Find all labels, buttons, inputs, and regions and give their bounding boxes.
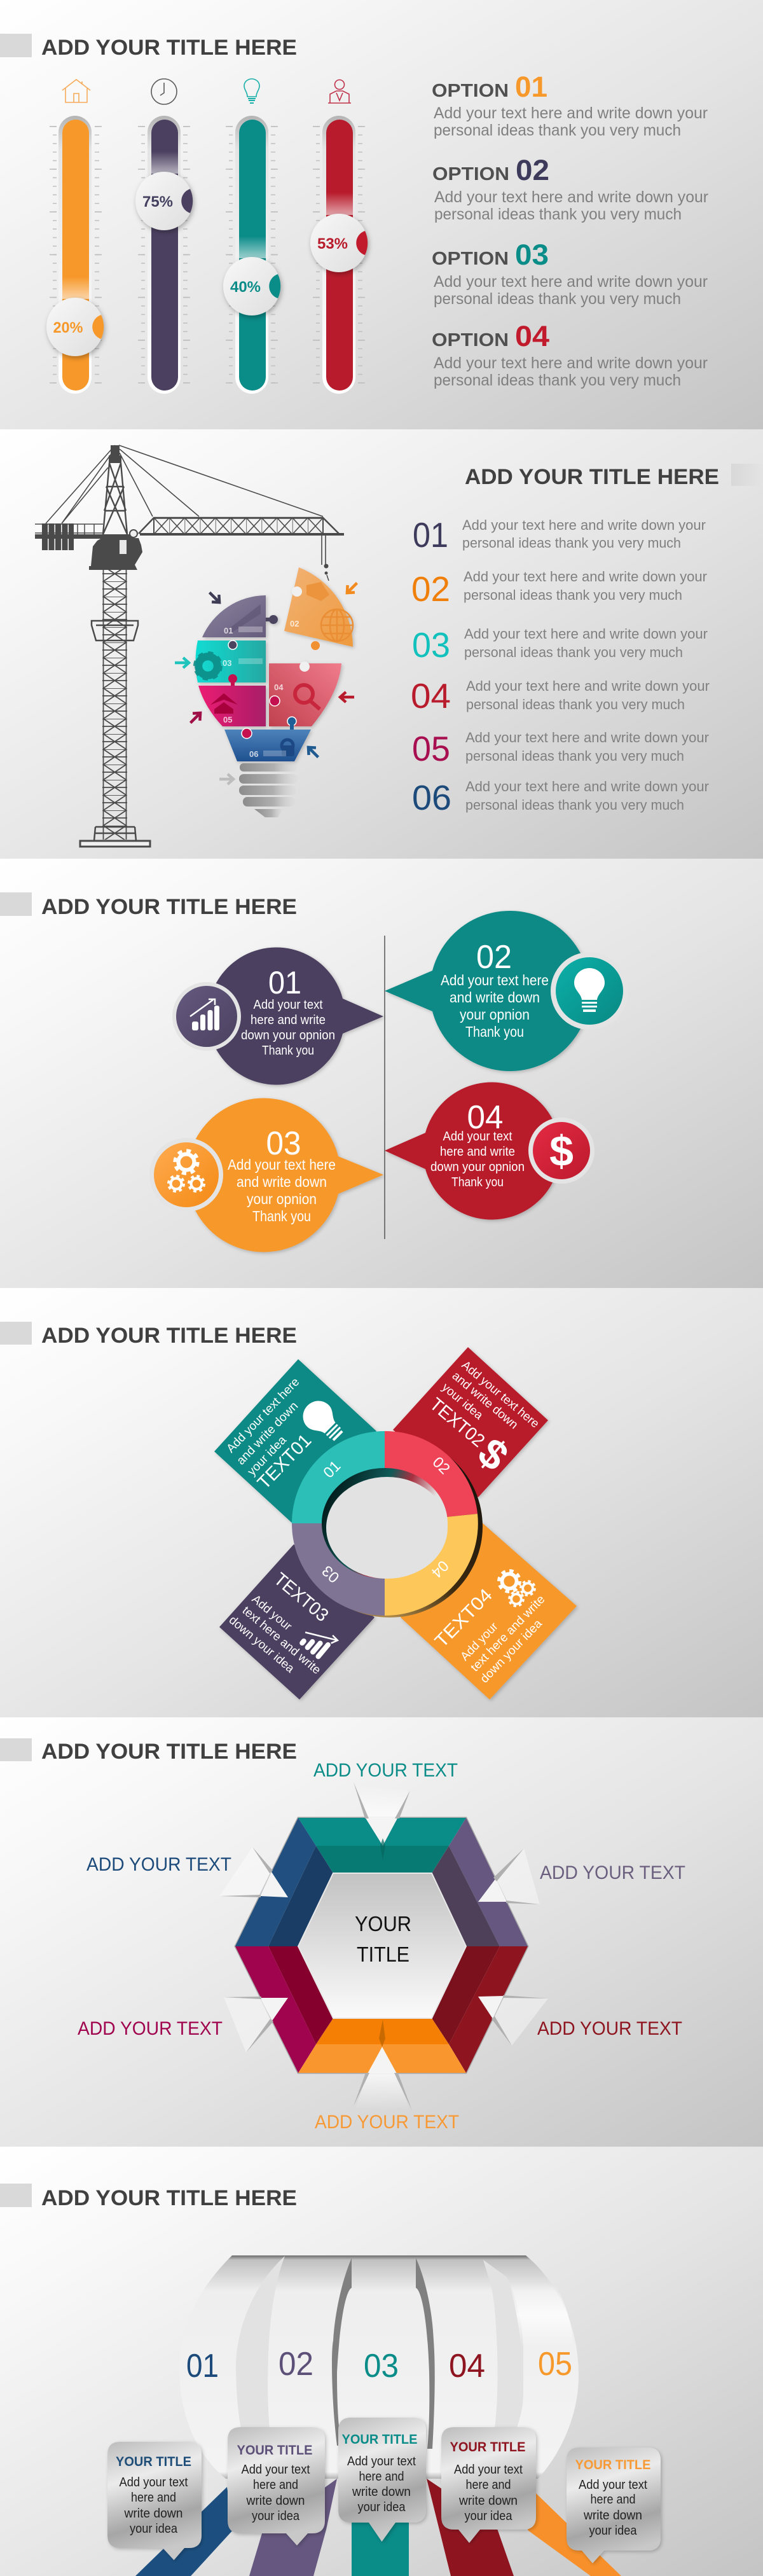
list item 04 (411, 676, 710, 716)
callout card 02: here and (253, 2478, 298, 2492)
speech bubble 04: here and write (440, 1145, 515, 1159)
speech bubble 04: Thank you (451, 1175, 504, 1189)
puzzle piece 06 (224, 730, 311, 761)
speech bubble 02: your opnion (460, 1006, 530, 1023)
panel: section 6 background (0, 2147, 763, 2576)
heading: section 4 title: ADD YOUR TITLE HERE (41, 1324, 297, 1348)
list item 05: personal ideas thank you very much (465, 748, 684, 764)
list item 01 (413, 515, 706, 555)
speech bubble 03 (149, 1098, 383, 1252)
text block: option 03: Add your text here and write down your (434, 273, 708, 291)
callout card 03: write down (352, 2485, 411, 2499)
heading: section 3 title: ADD YOUR TITLE HERE (41, 895, 297, 919)
ribbon 01 navy (135, 2487, 233, 2576)
callout card 01: here and (131, 2491, 176, 2505)
label: lower left: ADD YOUR TEXT (78, 2018, 223, 2039)
list item 05: 05 (412, 729, 450, 768)
heading: section 5 title: ADD YOUR TITLE HERE (41, 1740, 297, 1764)
puzzle piece 01 (202, 595, 278, 637)
light separator right (483, 2260, 523, 2462)
callout card 05: your idea (589, 2524, 637, 2538)
text block: option 04: 04 (515, 320, 549, 352)
text block: option 01: personal ideas thank you very much (434, 121, 681, 139)
speech bubble 03: 03 (266, 1125, 301, 1162)
callout card 04: write down (458, 2494, 518, 2508)
notch: lower left (224, 1997, 288, 2053)
text block: option 04: personal ideas thank you very much (434, 371, 681, 389)
text block: option 01: OPTION (432, 81, 509, 101)
speech bubble 03: Thank you (252, 1208, 311, 1224)
speech bubble 01: here and write (251, 1013, 326, 1027)
bulb screw base (239, 763, 298, 817)
card: TEXT01 teal (214, 1359, 376, 1523)
puzzle piece 03: 03 (223, 658, 231, 668)
segment: upper left navy (235, 1818, 333, 1946)
callout card 03: Add your text (347, 2455, 416, 2469)
speech bubble 02: Thank you (465, 1023, 524, 1040)
card: TEXT02 red: and write down (450, 1369, 520, 1432)
arrow: blue (305, 744, 322, 761)
label: upper right: ADD YOUR TEXT (540, 1862, 685, 1883)
list item 03: Add your text here and write down your (464, 626, 708, 642)
puzzle piece 02 orange on hook: 02 (290, 619, 299, 628)
card: TEXT03 purple: TEXT03 (270, 1569, 332, 1626)
arrow: teal (175, 658, 189, 668)
segment: bottom orange (298, 2018, 466, 2073)
speech bubble 04 (385, 1083, 595, 1220)
list item 05: Add your text here and write down your (465, 730, 709, 745)
puzzle piece 02 orange on hook (284, 567, 353, 647)
puzzle piece 04: 04 (274, 682, 284, 692)
hexagon shadow outline (235, 1818, 528, 2073)
notch: top (354, 1782, 410, 1860)
chart: segmented 3D ring: 04 (428, 1557, 452, 1581)
speech bubble 02 (385, 911, 628, 1071)
speech bubble 01: 01 (268, 965, 301, 1001)
card: TEXT04 orange: text here and write (468, 1593, 547, 1674)
list item 03 (412, 625, 708, 665)
chart: segmented 3D ring: 02 (429, 1453, 453, 1478)
text block: option 02: 02 (516, 154, 549, 186)
panel: section 1 background (0, 0, 763, 429)
card: TEXT04 orange: TEXT04 (431, 1585, 497, 1652)
arrow: dark (206, 589, 223, 606)
list item 06: 06 (412, 778, 451, 817)
ribbon 04 red (427, 2479, 514, 2576)
callout card 02 (228, 2427, 325, 2545)
puzzle piece 03 (196, 641, 266, 682)
card: TEXT03 purple: down your idea (226, 1614, 297, 1676)
light separator left (236, 2256, 285, 2436)
speech bubble 02: Add your text here (441, 972, 549, 988)
puzzle piece 05: 05 (223, 715, 232, 724)
ring segment 04 (385, 1514, 478, 1616)
speech bubble 03: and write down (237, 1174, 327, 1190)
notch: upper left (219, 1847, 288, 1897)
card: TEXT01 teal: your idea (245, 1433, 289, 1478)
text block: option 01: Add your text here and write down your (434, 104, 708, 122)
icon: gears (168, 1151, 204, 1191)
slider: 20 percent orange (46, 116, 104, 394)
puzzle piece 04 (269, 661, 341, 726)
slider: 40 percent teal (223, 116, 280, 394)
centre title: TITLE (357, 1942, 409, 1966)
card: TEXT02 red: TEXT02 (426, 1394, 488, 1451)
text block: option 01 (432, 71, 708, 139)
text block: option 04: OPTION (432, 330, 509, 350)
chart: segmented 3D ring: 01 (320, 1457, 344, 1481)
speech bubble 01: Thank you (262, 1044, 314, 1058)
callout card 01: write down (124, 2507, 183, 2521)
callout card 04: YOUR TITLE (450, 2440, 525, 2455)
list item 03: 03 (412, 625, 450, 665)
text block: option 03: OPTION (432, 249, 509, 269)
list item 06: personal ideas thank you very much (465, 797, 684, 813)
callout card 05: YOUR TITLE (575, 2458, 651, 2472)
callout card 03 (338, 2418, 426, 2542)
card: TEXT02 red: $ (469, 1429, 518, 1479)
heading: section 1 title: ADD YOUR TITLE HERE (41, 36, 297, 60)
arrow: gray (219, 774, 233, 784)
panel: section 2 background (0, 429, 763, 859)
callout card 04 (441, 2427, 536, 2543)
list item 01: personal ideas thank you very much (462, 535, 681, 551)
card: TEXT04 orange: down your idea (478, 1617, 545, 1686)
centre hexagon (298, 1873, 466, 2018)
speech bubble 01: down your opnion (241, 1028, 335, 1042)
callout card 05 (567, 2448, 661, 2563)
list item 06 (412, 778, 709, 817)
slider: 53 percent red (310, 116, 368, 394)
chart: segmented 3D ring: 03 (319, 1562, 343, 1586)
number 05: 05 (538, 2346, 572, 2383)
notch: lower right (478, 1995, 548, 2046)
notch: bottom (354, 2019, 412, 2110)
card: TEXT04 orange (401, 1522, 577, 1700)
text block: option 01: 01 (515, 71, 547, 103)
callout card 04: Add your text (454, 2463, 523, 2477)
callout card 01 (107, 2442, 202, 2560)
callout card 04: your idea (464, 2509, 512, 2523)
slider: 75 percent purple (135, 116, 193, 394)
list item 06: Add your text here and write down your (465, 779, 709, 794)
panel: section 5 background (0, 1717, 763, 2147)
speech bubble 04: Add your text (443, 1130, 512, 1144)
panel: section 3 background (0, 859, 763, 1288)
speech bubble 01 (172, 947, 383, 1085)
callout card 05: Add your text (579, 2478, 647, 2492)
speech bubble 03: your opnion (247, 1191, 317, 1207)
divider line (384, 936, 385, 1239)
number 04: 04 (449, 2348, 485, 2385)
list item 02: Add your text here and write down your (464, 569, 707, 585)
heading: section 2 title: ADD YOUR TITLE HERE (465, 465, 719, 489)
list item 01: Add your text here and write down your (462, 517, 706, 533)
icon: growth chart (190, 999, 219, 1030)
icon: bulb (574, 968, 605, 1012)
highlight on band 05 (509, 2283, 574, 2347)
segment: upper right purple (432, 1818, 528, 1946)
ring segment 03 (292, 1523, 385, 1616)
segment: top teal (298, 1818, 466, 1873)
text block: option 02: OPTION (432, 164, 509, 184)
number 03: 03 (364, 2348, 399, 2385)
slider: 20 percent orange: 20% (53, 319, 83, 336)
ribbon 05 orange (528, 2493, 621, 2576)
slider: 75 percent purple: 75% (142, 193, 173, 211)
callout card 02: YOUR TITLE (237, 2443, 313, 2458)
ring segment 01 (292, 1431, 385, 1523)
icon: dollar: $ (549, 1127, 574, 1175)
text block: option 02: personal ideas thank you very much (434, 205, 682, 223)
arrow: maroon (187, 709, 204, 726)
speech bubble 01: Add your text (253, 998, 323, 1012)
puzzle piece 05 (198, 686, 266, 726)
label: bottom: ADD YOUR TEXT (315, 2112, 459, 2133)
list item 01: 01 (413, 515, 448, 555)
label: top: ADD YOUR TEXT (313, 1760, 458, 1781)
speech bubble 02: 02 (476, 939, 512, 976)
callout card 03: YOUR TITLE (342, 2432, 417, 2447)
centre title: YOUR (355, 1912, 411, 1935)
ring segment 02 (385, 1431, 478, 1523)
connector knobs (228, 641, 320, 769)
text block: option 03: 03 (515, 239, 549, 271)
text block: option 04: Add your text here and write down your (434, 354, 708, 372)
callout card 03: your idea (357, 2500, 406, 2514)
chart: hexagon frame (219, 1782, 548, 2110)
callout card 02: write down (246, 2494, 305, 2508)
card: TEXT03 purple: text here and write (240, 1604, 323, 1677)
callout card 02: Add your text (242, 2463, 310, 2477)
speech bubble 03: Add your text here (228, 1156, 336, 1173)
puzzle piece 06: 06 (249, 749, 258, 759)
callout card 01: Add your text (120, 2476, 188, 2489)
chart: segmented 3D ring (292, 1431, 483, 1617)
card: TEXT01 teal: TEXT01 (254, 1430, 315, 1493)
label: upper left: ADD YOUR TEXT (86, 1854, 231, 1875)
icon: house (62, 80, 90, 102)
card: TEXT03 purple: Add your (249, 1593, 294, 1633)
text block: option 03: personal ideas thank you very much (434, 290, 681, 308)
list item 02: personal ideas thank you very much (464, 587, 682, 603)
list item 02: 02 (411, 569, 450, 609)
slider: 53 percent red: 53% (317, 235, 348, 253)
illustration: puzzle light bulb (175, 567, 361, 817)
centre title (355, 1912, 411, 1966)
text block: option 03 (432, 239, 708, 308)
slider: 40 percent teal: 40% (230, 279, 261, 296)
segment: lower left magenta (235, 1946, 333, 2073)
ribbon 03 teal (352, 2479, 409, 2576)
list item 05 (412, 729, 709, 768)
callout card 03: here and (359, 2470, 404, 2484)
card: TEXT02 red: your idea (439, 1381, 486, 1423)
list item 02 (411, 569, 707, 609)
speech bubble 02: and write down (450, 989, 540, 1006)
label: lower right: ADD YOUR TEXT (537, 2018, 682, 2039)
list item 04: personal ideas thank you very much (466, 696, 685, 712)
number 01: 01 (186, 2348, 219, 2385)
arrow: red (340, 692, 354, 702)
icon: light bulb outline (244, 79, 259, 103)
card: TEXT01 teal: and write down (234, 1399, 301, 1467)
ribbon 02 purple (249, 2479, 337, 2576)
callout card 02: your idea (252, 2509, 300, 2523)
list item 03: personal ideas thank you very much (464, 644, 683, 660)
arrow: orange (343, 579, 361, 597)
callout card 05: write down (583, 2509, 642, 2523)
card: TEXT02 red (393, 1347, 548, 1497)
callout card 01: your idea (130, 2522, 178, 2536)
segment: lower right red (432, 1946, 528, 2073)
number 02: 02 (278, 2346, 313, 2383)
icon: clock (151, 79, 177, 104)
list item 04: 04 (411, 676, 451, 716)
notch: upper right (478, 1848, 540, 1904)
panel: section 4 background (0, 1288, 763, 1717)
text block: option 02: Add your text here and write down your (434, 188, 708, 206)
card: TEXT04 orange: Add your (458, 1619, 501, 1663)
card: TEXT02 red: Add your text here (459, 1359, 542, 1431)
illustration: tower crane (35, 445, 344, 847)
icon: business person (328, 80, 351, 103)
speech bubble 04: down your opnion (430, 1160, 525, 1174)
illustration: paper barrel bands (179, 2255, 579, 2479)
callout card 01: YOUR TITLE (116, 2455, 191, 2469)
callout card 04: here and (465, 2478, 511, 2492)
dark gap right (416, 2258, 435, 2449)
speech bubble 04: 04 (467, 1099, 504, 1136)
text block: option 02 (432, 154, 708, 223)
heading: section 6 title: ADD YOUR TITLE HERE (41, 2186, 297, 2210)
text block: option 04 (432, 320, 708, 389)
dark gap left (332, 2258, 352, 2446)
callout card 05: here and (590, 2493, 636, 2507)
card: TEXT01 teal: Add your text here (224, 1375, 302, 1455)
puzzle piece 01: 01 (224, 626, 233, 635)
list item 04: Add your text here and write down your (466, 678, 710, 694)
card: TEXT03 purple (219, 1544, 375, 1700)
